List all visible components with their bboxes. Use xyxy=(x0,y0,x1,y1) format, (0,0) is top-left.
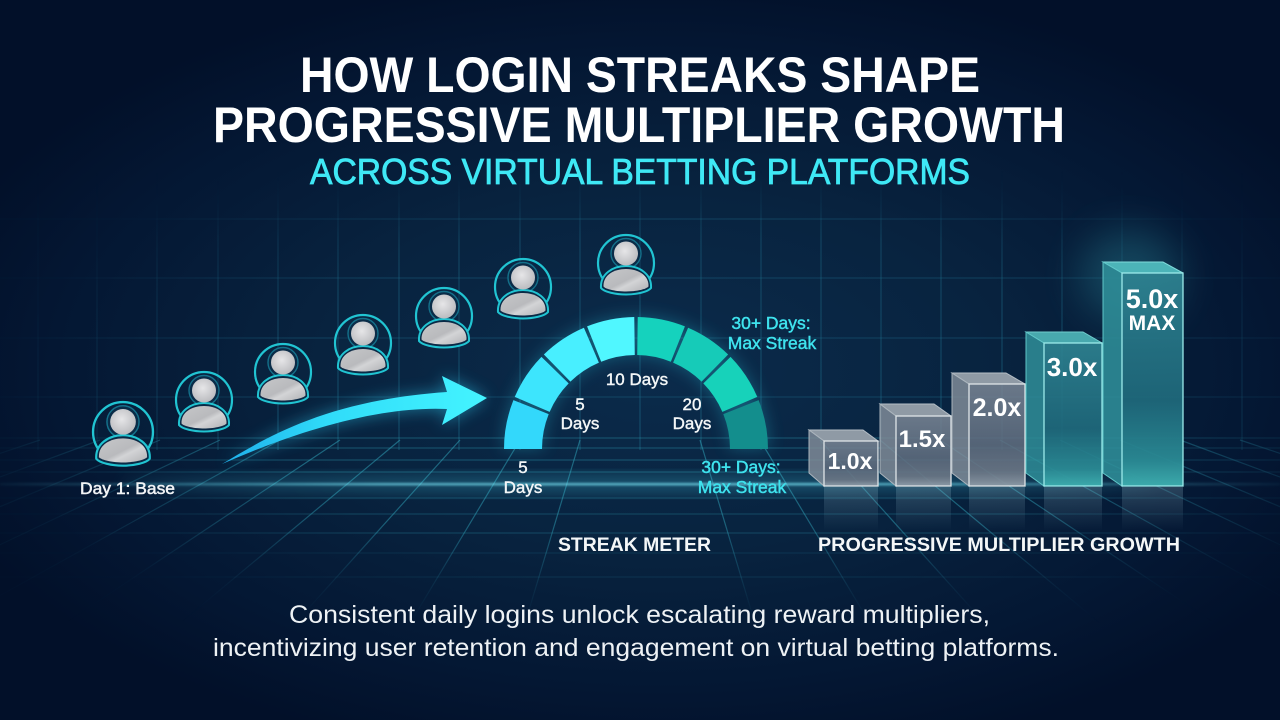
caption: Consistent daily logins unlock escalating reward multipliers, xyxy=(289,601,990,629)
top max streak label: 30+ Days: xyxy=(731,313,811,333)
top max streak label: Max Streak xyxy=(728,333,816,353)
bottom max streak label xyxy=(698,457,786,497)
gauge segments xyxy=(523,336,749,449)
heading: progressive multiplier growth: PROGRESSIVE MULTIPLIER GROWTH xyxy=(818,535,1180,556)
streak meter gauge xyxy=(504,313,816,497)
bar 1.5x xyxy=(880,404,951,486)
icon: user 2 xyxy=(176,372,232,432)
multiplier bars xyxy=(809,230,1183,531)
subtitle: ACROSS VIRTUAL BETTING PLATFORMS xyxy=(310,151,970,192)
gauge labels: 20 xyxy=(683,395,701,414)
icon: user 5 xyxy=(416,288,472,348)
arrow xyxy=(222,376,487,464)
bar 5.0x max: MAX xyxy=(1129,312,1175,335)
gauge labels xyxy=(504,370,711,497)
bar reflections xyxy=(824,487,1183,531)
bar glow xyxy=(1080,230,1180,320)
bar 3.0x: 3.0x xyxy=(1047,352,1098,382)
bottom max streak label: 30+ Days: xyxy=(701,457,781,477)
login streak avatars xyxy=(80,235,654,498)
caption xyxy=(213,601,1059,662)
bottom max streak label: Max Streak xyxy=(698,477,786,497)
gauge labels: 10 Days xyxy=(606,370,668,389)
title xyxy=(213,47,1065,192)
icon: user day 1 xyxy=(93,402,153,466)
background grid xyxy=(0,193,1280,602)
gauge labels: 5 xyxy=(575,395,585,414)
label: day 1 base: Day 1: Base xyxy=(80,480,175,498)
icon: user 3 xyxy=(255,344,311,404)
title line 2: PROGRESSIVE MULTIPLIER GROWTH xyxy=(213,97,1065,153)
bar 5.0x max: 5.0x xyxy=(1126,284,1178,314)
icon: user 6 xyxy=(495,259,551,318)
bar 2.0x xyxy=(952,373,1025,486)
top max streak label xyxy=(728,313,816,353)
bar 3.0x xyxy=(1026,332,1102,486)
bar 1.0x: 1.0x xyxy=(828,448,873,474)
horizon glow xyxy=(0,477,1280,491)
bar 1.0x xyxy=(809,430,878,486)
gauge labels: 5 xyxy=(518,458,528,477)
caption: incentivizing user retention and engagement on virtual betting platforms. xyxy=(213,634,1059,662)
heading: streak meter: STREAK METER xyxy=(558,535,711,556)
bar 1.5x: 1.5x xyxy=(899,426,946,453)
gauge labels: Days xyxy=(504,478,542,497)
bar 2.0x: 2.0x xyxy=(973,394,1021,422)
icon: user 4 xyxy=(335,315,391,374)
title line 1: HOW LOGIN STREAKS SHAPE xyxy=(300,47,980,103)
gauge labels: Days xyxy=(673,414,711,433)
gauge glow xyxy=(523,336,749,449)
icon: user 7 xyxy=(598,235,654,294)
bar 5.0x max xyxy=(1103,262,1183,486)
gauge labels: Days xyxy=(561,414,599,433)
